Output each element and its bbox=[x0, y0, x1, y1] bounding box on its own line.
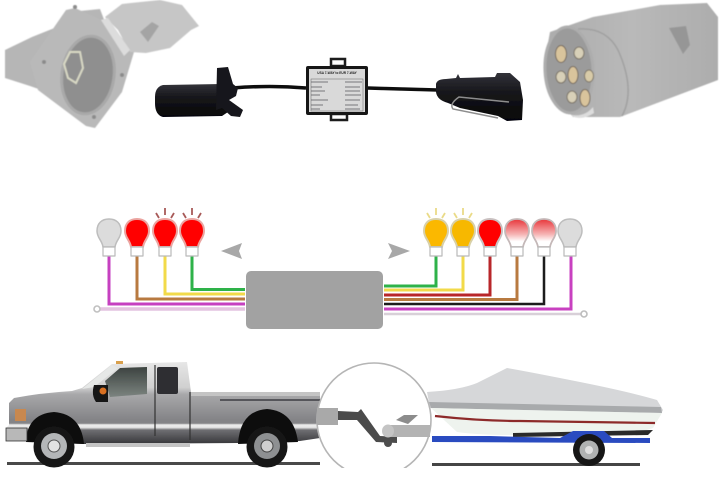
left wires bbox=[94, 256, 245, 312]
grey round seven-pin plug photo bbox=[543, 3, 718, 118]
bulb: amber flashing bbox=[451, 208, 475, 256]
bumper bbox=[6, 428, 27, 441]
converter cable with black plugs bbox=[155, 59, 523, 121]
receiver tube bbox=[317, 408, 338, 425]
wiring diagram: control box bbox=[246, 271, 383, 329]
front window bbox=[105, 367, 147, 397]
grey trailer socket photo bbox=[5, 0, 199, 128]
front wheel arch bbox=[26, 412, 84, 444]
boat cover bbox=[427, 368, 663, 414]
bulb: red flashing bbox=[153, 208, 177, 256]
step bar bbox=[86, 443, 190, 447]
hull bbox=[431, 408, 662, 435]
black plug with clip bbox=[436, 73, 523, 121]
bulb: red fade bbox=[532, 219, 556, 256]
bulb: grey off bbox=[97, 219, 121, 256]
bed top rail bbox=[191, 392, 320, 396]
bulb: red flashing bbox=[180, 208, 204, 256]
coupler bbox=[382, 415, 430, 438]
hull red stripe bbox=[435, 416, 655, 423]
rear fender stripe bbox=[220, 399, 320, 401]
pickup truck bbox=[6, 361, 320, 468]
junction box: USA 7-WAY to EUR 7-WAY bbox=[317, 71, 358, 75]
hitch ball bbox=[384, 442, 392, 447]
trailer wheel bbox=[573, 434, 605, 466]
bulb: grey off bbox=[558, 219, 582, 256]
rear wheel arch bbox=[238, 409, 298, 444]
ground shadow bbox=[432, 463, 640, 466]
bulb: red on bbox=[478, 219, 502, 256]
headlight bbox=[15, 409, 26, 421]
rear wheel bbox=[246, 426, 288, 468]
junction box bbox=[306, 59, 368, 120]
bulb: amber flashing bbox=[424, 208, 448, 256]
hull shadow bbox=[513, 430, 653, 437]
boat on trailer bbox=[427, 368, 663, 466]
bulb: red on bbox=[125, 219, 149, 256]
black socket plug bbox=[155, 67, 243, 117]
rear window bbox=[157, 367, 178, 394]
right wires bbox=[384, 256, 587, 317]
cab marker light bbox=[116, 361, 123, 364]
mirror bbox=[93, 385, 108, 402]
cable bbox=[232, 86, 438, 90]
bulb: red fade bbox=[505, 219, 529, 256]
hitch magnifier circle bbox=[317, 363, 431, 477]
arrow: right bbox=[388, 243, 410, 259]
ground shadow bbox=[7, 462, 320, 465]
right bulbs bbox=[424, 208, 582, 256]
truck body bbox=[6, 362, 320, 444]
cab door lines bbox=[155, 365, 190, 440]
left bulbs bbox=[97, 208, 204, 256]
trailer frame bbox=[432, 431, 650, 443]
front wheel bbox=[34, 426, 74, 468]
windshield bbox=[82, 365, 118, 389]
drawbar bbox=[338, 409, 397, 443]
cover band bbox=[429, 402, 662, 413]
arrow: left bbox=[221, 243, 242, 259]
